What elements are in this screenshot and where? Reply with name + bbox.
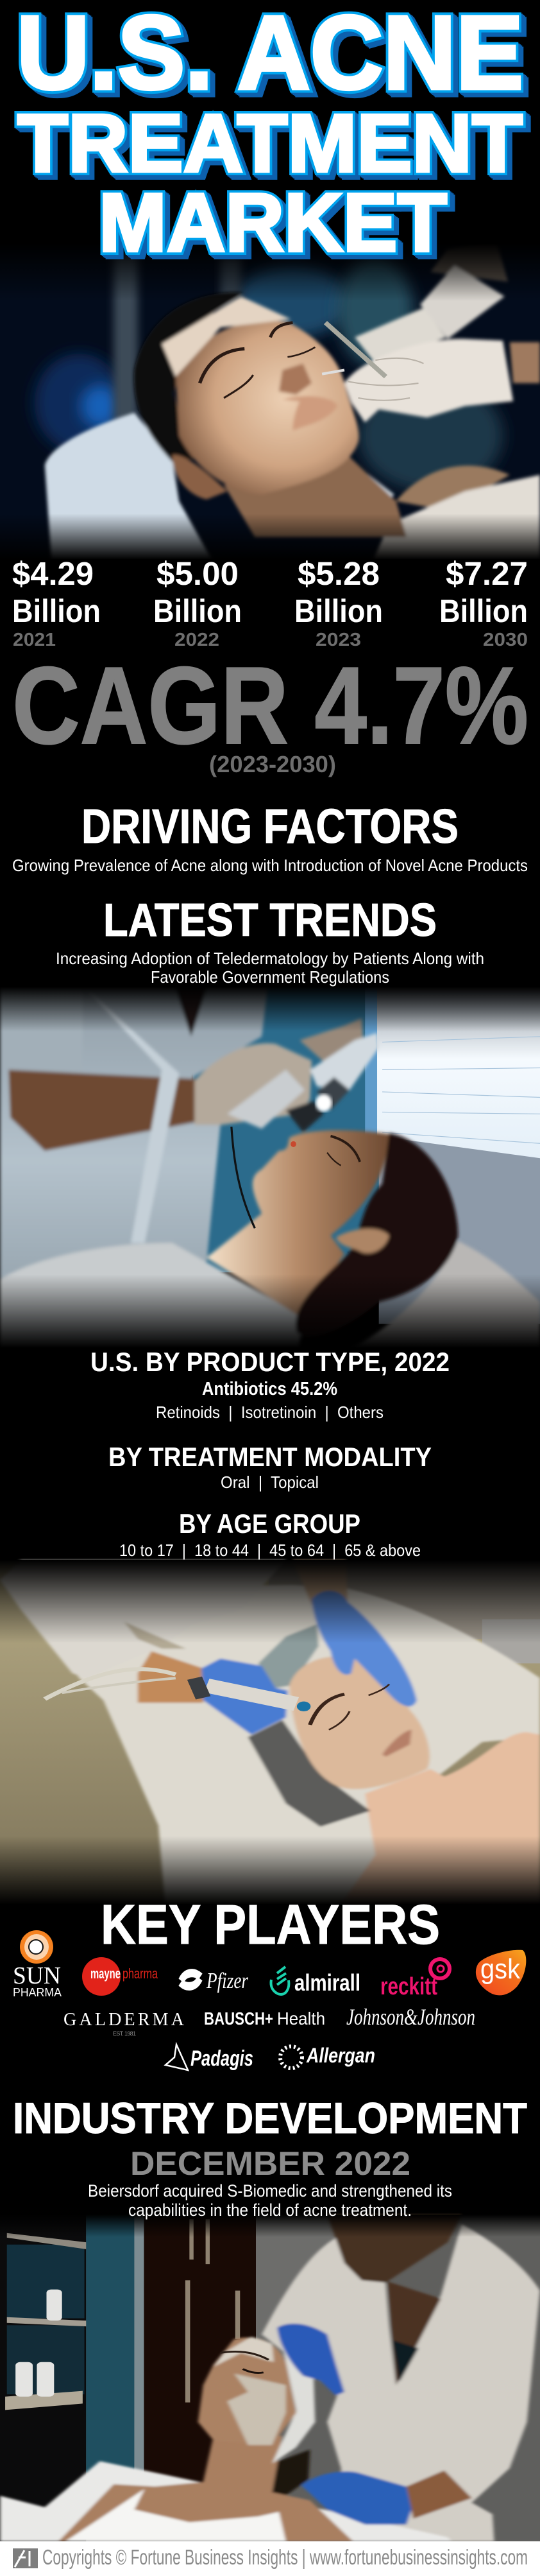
market value 2021	[12, 555, 101, 650]
logo: Bausch Health: BAUSCH+	[204, 2009, 273, 2028]
development text	[88, 2181, 452, 2220]
photo: clinician applying peel mask to patient	[0, 2215, 540, 2541]
logo: Reckitt	[380, 1959, 450, 2000]
segment: by product type: U.S. BY PRODUCT TYPE, 2022	[90, 1347, 450, 1377]
segment: by product type: Retinoids | Isotretinoin | Others	[156, 1403, 384, 1422]
photo: clinician using a light device on patient's face	[0, 978, 540, 1368]
market value 2021: 2021	[13, 630, 56, 650]
logo: Galderma: EST. 1981	[113, 2030, 136, 2037]
market value 2021: $4.29	[12, 555, 94, 592]
fades on first photo	[0, 218, 540, 983]
logo: Sun Pharma	[13, 1930, 62, 1999]
logo: Sun Pharma: PHARMA	[13, 1986, 62, 1999]
development text: Beiersdorf acquired S-Biomedic and strengthened its	[88, 2181, 452, 2200]
segment: by age group: BY AGE GROUP	[179, 1508, 360, 1539]
segment: by product type	[90, 1347, 450, 1422]
market value 2023	[294, 555, 383, 650]
logo: Padagis: Padagis	[190, 2046, 253, 2071]
market value 2030: Billion	[439, 593, 528, 629]
fades on second photo	[0, 963, 540, 1560]
market value 2030	[439, 555, 528, 650]
fade on fourth photo	[0, 2215, 540, 2237]
development date: DECEMBER 2022	[130, 2145, 410, 2183]
latest trends text	[56, 949, 484, 987]
segment: by treatment modality: Oral | Topical	[221, 1473, 319, 1492]
market value 2030: $7.27	[446, 555, 528, 592]
logo: Johnson & Johnson: Johnson&Johnson	[346, 2004, 475, 2030]
logo: Mayne Pharma: mayne	[90, 1966, 121, 1982]
segment: by age group: 10 to 17 | 18 to 44 | 45 to 64 | 65 & above	[119, 1541, 421, 1560]
heading: driving factors: DRIVING FACTORS	[81, 799, 459, 853]
logo: Mayne Pharma	[82, 1957, 158, 1996]
logo: Padagis	[165, 2044, 253, 2071]
market value 2021: Billion	[12, 593, 101, 629]
CAGR period: (2023-2030)	[209, 751, 336, 777]
market value 2023: $5.28	[298, 555, 380, 592]
market value 2022: 2022	[174, 630, 219, 650]
market value 2023: 2023	[316, 630, 361, 650]
title: MARKET	[99, 177, 447, 269]
logo: GSK: gsk	[480, 1953, 521, 1985]
logo: Bausch Health: Health	[277, 2009, 325, 2028]
logo: GSK	[476, 1950, 526, 1995]
title	[17, 0, 523, 269]
heading: key players: KEY PLAYERS	[101, 1894, 440, 1956]
logo: Almirall	[271, 1967, 360, 1996]
photo: cosmetologist using hydro-dermabrasion handpiece	[0, 1560, 540, 1909]
title: TREATMENT	[17, 98, 523, 189]
fades on third photo	[0, 1560, 540, 2218]
logo: Allergan: Allergan	[306, 2044, 375, 2067]
logo: Sun Pharma: SUN	[13, 1962, 61, 1989]
logo: Almirall: almirall	[294, 1969, 360, 1996]
logo: Mayne Pharma: pharma	[122, 1966, 158, 1982]
icon: Fortune Business Insights logo	[13, 2548, 38, 2568]
market value 2023: Billion	[294, 593, 383, 629]
segment: by age group	[119, 1508, 421, 1560]
market value 2022	[153, 555, 242, 650]
photo: patient receiving facial treatment from gloved hands	[0, 229, 540, 564]
heading: latest trends: LATEST TRENDS	[103, 895, 437, 946]
market value 2030: 2030	[483, 630, 528, 650]
segment: by treatment modality: BY TREATMENT MODALITY	[108, 1442, 432, 1472]
market value 2022: Billion	[153, 593, 242, 629]
footer	[0, 2541, 540, 2576]
logo: Pfizer: Pfizer	[206, 1968, 248, 1993]
segment: by product type: Antibiotics 45.2%	[202, 1379, 337, 1399]
segment: by treatment modality	[108, 1442, 432, 1492]
logo: Galderma: GALDERMA	[63, 2010, 185, 2030]
market value 2022: $5.00	[156, 555, 239, 592]
logo: Pfizer	[180, 1968, 248, 1993]
logo: Allergan	[280, 2044, 375, 2068]
title: TREATMENT	[17, 98, 523, 189]
logo: Reckitt: reckitt	[380, 1973, 437, 2000]
latest trends text: Increasing Adoption of Teledermatology by Patients Along with	[56, 949, 484, 968]
latest trends text: Favorable Government Regulations	[151, 967, 389, 987]
title: MARKET	[99, 177, 447, 269]
development text: capabilities in the field of acne treatment.	[128, 2200, 412, 2220]
